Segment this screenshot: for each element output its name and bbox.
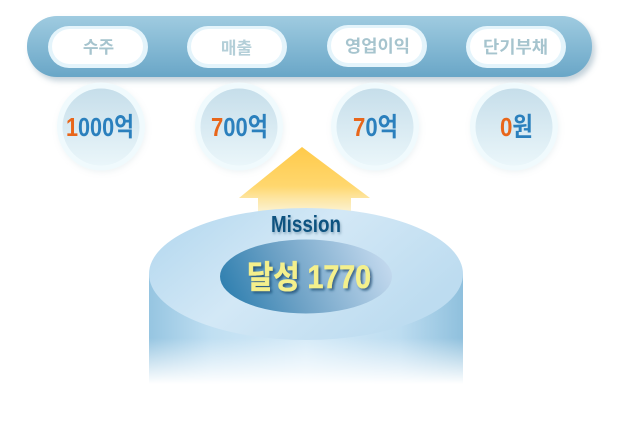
- arrow: upward: [239, 147, 370, 214]
- value circle: 70억: [331, 82, 419, 170]
- inner ellipse: [220, 240, 392, 314]
- cylinder: [148, 208, 464, 385]
- cylinder body: [148, 274, 464, 385]
- label pill: 단기부채: 단기부채: [483, 38, 548, 57]
- value circle: 0원: 0원: [500, 112, 533, 142]
- value circle: 1000억: [57, 82, 145, 170]
- top bar: [27, 16, 592, 77]
- label pill: 단기부채: [466, 26, 566, 68]
- label pill: 영업이익: [327, 25, 427, 67]
- cylinder top: [149, 208, 463, 340]
- label pill: 수주: [48, 26, 148, 68]
- value circle: 1000억: 1000억: [66, 112, 134, 142]
- value circle: 70억: 70억: [353, 112, 398, 142]
- label pill: 수주: 수주: [83, 38, 114, 57]
- achievement label: 달성 1770: [247, 259, 371, 295]
- label pill: 매출: [187, 26, 287, 68]
- label pill: 매출: 매출: [221, 39, 252, 58]
- value circle: 700억: 700억: [211, 112, 268, 142]
- value circle: 700억: [195, 82, 283, 170]
- label pill: 영업이익: 영업이익: [345, 37, 410, 56]
- value circle: 0원: [470, 82, 558, 170]
- mission label: Mission: [271, 211, 341, 237]
